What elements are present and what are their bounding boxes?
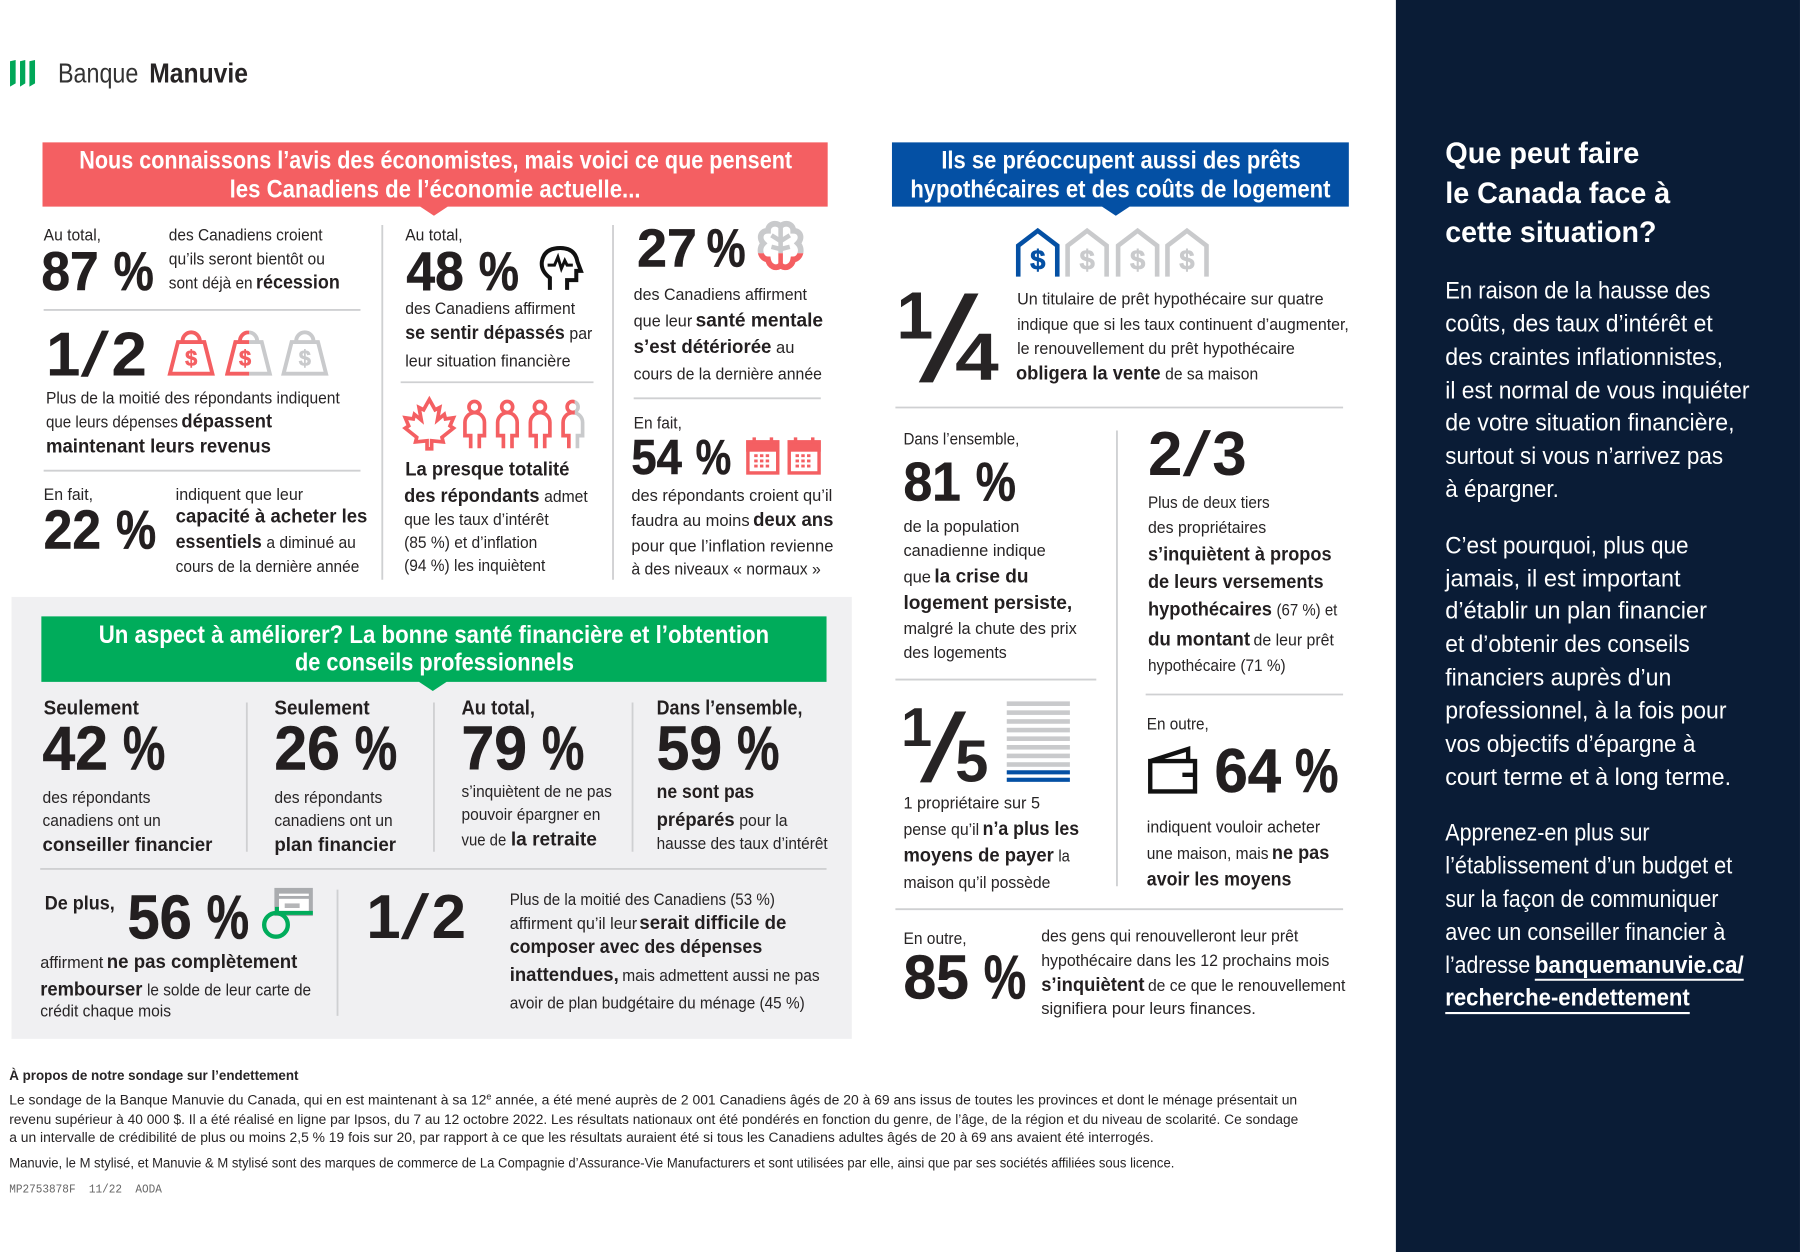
- stat: 81 % housing crisis: Dans l’ensemble,: [903, 430, 1019, 449]
- number: 42 %: [43, 715, 165, 784]
- panel background: [12, 597, 852, 1039]
- number: 85 %: 85: [903, 944, 969, 1013]
- stat: 56 % credit card: De plus,: [45, 894, 115, 915]
- number: 56 %: [127, 883, 249, 952]
- fraction: 1/5: 1: [901, 696, 932, 758]
- stat: 56 % credit card: le solde de leur carte de: [147, 981, 311, 1000]
- heading banner: blue: Ils se préoccupent aussi des prêts: [941, 148, 1301, 175]
- stat: 2/3 mortgage payments: de leurs versements: [1148, 572, 1324, 593]
- sidebar paragraph 1: des craintes inflationnistes,: [1445, 344, 1723, 371]
- stat: 81 % housing crisis: canadienne indique: [903, 541, 1046, 560]
- heading banner: blue: hypothécaires et des coûts de logement: [910, 176, 1330, 203]
- icon: calendars: [748, 437, 819, 473]
- sidebar paragraph 3 with link: avec un conseiller financier à: [1445, 919, 1726, 946]
- sidebar paragraph 1: coûts, des taux d’intérêt et: [1445, 311, 1713, 338]
- icon: credit card statement: [264, 888, 313, 937]
- footer: survey notes: [9, 1067, 1298, 1197]
- stat: 2/3 mortgage payments: de leur prêt: [1254, 631, 1334, 650]
- number: 22 %: %: [116, 499, 156, 561]
- stat: 85 % renewal: signifiera pour leurs finances.: [1041, 999, 1256, 1018]
- number: 27 %: %: [707, 218, 746, 278]
- stat: 48 % overwhelmed: Au total,: [405, 225, 463, 244]
- number: 54 %: [631, 430, 731, 485]
- stat: nearly all respondents: des répondants: [404, 486, 540, 507]
- fraction: 1/4: 4: [955, 321, 999, 395]
- stat: 1/5 cannot afford: n’a plus les: [983, 819, 1079, 840]
- heading banner: green: de conseils professionnels: [295, 649, 574, 676]
- number: 54 %: 54: [631, 430, 682, 485]
- stat: 42 % advisor: conseiller financier: [43, 835, 213, 856]
- number: 26 %: [274, 715, 397, 784]
- number: 59 %: %: [737, 715, 779, 784]
- stat: 1/5 cannot afford: 1 propriétaire sur 5: [903, 794, 1040, 813]
- stat: 27 % mental health: au: [776, 338, 794, 357]
- stat: 48 % overwhelmed: [405, 225, 593, 371]
- stat: nearly all respondents: [404, 399, 588, 575]
- number: 79 %: [461, 715, 584, 784]
- stat: 2/3 mortgage payments: s’inquiètent à propos: [1148, 545, 1332, 566]
- heading banner: red: les Canadiens de l’économie actuelle...: [230, 176, 641, 203]
- icon: houses: $: [1030, 245, 1045, 276]
- fraction: 2/3: 3: [1212, 420, 1247, 489]
- fraction: 1/4: 1: [897, 280, 933, 354]
- sidebar paragraph 2: financiers auprès d’un: [1445, 664, 1671, 691]
- stat: 85 % renewal: En outre,: [903, 929, 967, 948]
- number: 56 %: 56: [127, 883, 192, 952]
- icon: ten lines, two highlighted: [1007, 701, 1070, 782]
- stat: 1/2 unexpected expenses: composer avec des dépenses: [510, 937, 762, 958]
- stat: 87 % recession: qu’ils seront bientôt ou: [169, 249, 325, 268]
- stat: 27 % mental health: cours de la dernière année: [634, 364, 822, 383]
- stat: 1/2 spending: dépassent: [181, 411, 273, 432]
- number: 79 %: %: [542, 715, 584, 784]
- stat: 54 % two years: faudra au moins: [631, 511, 750, 530]
- number: 85 %: %: [984, 944, 1026, 1013]
- stat: 79 % retirement: s’inquiètent de ne pas: [461, 782, 612, 801]
- stat: 59 % unprepared: ne sont pas: [657, 782, 754, 803]
- stat: 85 % renewal: de ce que le renouvellement: [1148, 976, 1346, 995]
- stat: 85 % renewal: s’inquiètent: [1041, 975, 1145, 996]
- number: 79 %: 79: [461, 715, 527, 784]
- sidebar paragraph 1: il est normal de vous inquiéter: [1445, 377, 1749, 404]
- number: 48 %: 48: [406, 240, 464, 302]
- stat: 64 % buy a home: une maison, mais: [1147, 844, 1268, 863]
- stat: 79 % retirement: la retraite: [511, 829, 597, 850]
- stat: 1/5 cannot afford: pense qu’il: [903, 820, 979, 839]
- sidebar paragraph 2: jamais, il est important: [1444, 566, 1681, 593]
- stat: 26 % plan: Seulement: [274, 697, 370, 720]
- sidebar paragraph 3 with link: [1445, 819, 1744, 1013]
- stat: 85 % renewal: des gens qui renouvelleront leur prêt: [1041, 927, 1299, 946]
- stat: 87 % recession: Au total,: [44, 225, 101, 244]
- number: 85 %: [903, 944, 1026, 1013]
- fraction: 2/3: /: [1179, 420, 1214, 489]
- number: 26 %: %: [355, 715, 397, 784]
- stat: 56 % credit card: affirment: [40, 953, 104, 972]
- stat: 1/2 spending: que leurs dépenses: [46, 412, 178, 431]
- number: 48 %: %: [479, 240, 519, 302]
- sidebar heading: [1445, 137, 1671, 249]
- number: 26 %: 26: [274, 715, 340, 784]
- stat: 1/5 cannot afford: maison qu’il possède: [903, 873, 1050, 892]
- stat: nearly all respondents: que les taux d’intérêt: [404, 510, 549, 529]
- stat: 54 % two years: pour que l’inflation revienne: [631, 536, 833, 555]
- fraction: 1/5: [901, 695, 988, 801]
- stat: 85 % renewal: hypothécaire dans les 12 prochains mois: [1041, 951, 1329, 970]
- stat: 87 % recession: sont déjà en: [169, 274, 253, 293]
- sidebar paragraph 2: professionnel, à la fois pour: [1445, 698, 1727, 725]
- fraction: 1/5: /: [913, 695, 972, 801]
- stat: 64 % buy a home: ne pas: [1272, 843, 1329, 864]
- stat: 59 % unprepared: préparés: [657, 810, 735, 831]
- sidebar paragraph 1: [1445, 277, 1749, 503]
- stat: 22 % essentials: capacité à acheter les: [176, 507, 367, 528]
- stat: 79 % retirement: vue de: [461, 830, 506, 849]
- number: 48 %: [406, 240, 519, 302]
- footer: survey notes: année, a été mené auprès de 2 001 Canadiens âgés de 20 à 69 ans issus de toutes les provinces et dont le ménage présentait un: [491, 1091, 1297, 1107]
- stat: 1/5 cannot afford: la: [1058, 846, 1070, 865]
- stat: 22 % essentials: essentiels: [176, 532, 262, 553]
- number: 87 %: 87: [41, 240, 99, 302]
- stat: 54 % two years: des répondants croient qu’il: [631, 486, 832, 505]
- stat: 81 % housing crisis: des logements: [903, 643, 1007, 662]
- fraction: 1/2: [46, 320, 147, 389]
- stat: 42 % advisor: [43, 697, 213, 856]
- icon: head with pulse: [542, 248, 581, 290]
- stat: 22 % essentials: a diminué au: [266, 533, 356, 552]
- fraction: 1/2: [366, 883, 466, 952]
- footer: survey notes: Manuvie, le M stylisé, et Manuvie & M stylisé sont des marques de commerce de La Compagnie d’Assurance-Vie Manufacturers et sont utilisées par elle, ainsi que par ses sociétés affiliées sous licence.: [9, 1154, 1174, 1170]
- stat: 81 % housing crisis: [903, 430, 1077, 662]
- icon: Manulife stripes: [10, 60, 35, 87]
- stat: nearly all respondents: (85 %) et d’inflation: [404, 533, 537, 552]
- stat: 42 % advisor: Seulement: [44, 697, 139, 720]
- icon: houses: $: [1130, 245, 1145, 276]
- number: 54 %: %: [696, 430, 731, 485]
- number: 22 %: [44, 499, 156, 561]
- sidebar paragraph 2: C’est pourquoi, plus que: [1445, 532, 1689, 559]
- stat: 1/2 unexpected expenses: avoir de plan budgétaire du ménage (45 %): [510, 993, 805, 1012]
- footer: survey notes: revenu supérieur à 40 000 $. Il a été réalisé en ligne par Ipsos, du 7 au 12 octobre 2022. Les résultats nationaux ont été pondérés en fonction du genre, de l’âge, de la région et du niveau de scolarité. Ce sondage: [9, 1111, 1298, 1127]
- stat: 81 % housing crisis: malgré la chute des prix: [903, 619, 1077, 638]
- sidebar paragraph 3 with link: l’adresse: [1445, 952, 1530, 979]
- sidebar paragraph 3 with link: recherche-endettement: [1445, 985, 1690, 1012]
- footer: survey notes: e: [486, 1092, 491, 1102]
- stat: 1/4 forced sale: obligera la vente: [1016, 363, 1161, 384]
- stat: 26 % plan: canadiens ont un: [274, 811, 393, 830]
- heading banner: green: Un aspect à améliorer? La bonne santé financière et l’obtention: [99, 622, 769, 649]
- stat: 27 % mental health: santé mentale: [696, 310, 823, 331]
- stat: 26 % plan: plan financier: [274, 835, 397, 856]
- stat: 81 % housing crisis: logement persiste,: [903, 593, 1072, 614]
- fraction: 1/4: /: [910, 272, 987, 405]
- stat: 85 % renewal: [903, 927, 1346, 1018]
- number: 27 %: 27: [637, 218, 697, 278]
- panel: sidebar call to action: [1396, 0, 1800, 1252]
- stat: 2/3 mortgage payments: du montant: [1148, 630, 1251, 651]
- number: 42 %: %: [123, 715, 165, 784]
- stat: 1/2 unexpected expenses: [366, 883, 820, 1012]
- number: 87 %: [41, 240, 154, 302]
- sidebar heading: Que peut faire: [1445, 137, 1639, 170]
- stat: 59 % unprepared: pour la: [739, 811, 788, 830]
- number: 59 %: [657, 715, 779, 784]
- fraction: 1/2: 2: [432, 883, 466, 952]
- icon: shopping bags: $: [239, 346, 251, 371]
- icon: wallet: [1150, 749, 1195, 791]
- fraction: 1/5: 5: [955, 728, 988, 795]
- footer: survey notes: Le sondage de la Banque Manuvie du Canada, qui en est maintenant à sa 12: [9, 1091, 493, 1107]
- icon: maple leaf: [405, 399, 453, 449]
- stat: 1/4 forced sale: le renouvellement du prêt hypothécaire: [1017, 339, 1295, 358]
- number: 27 %: [637, 218, 746, 278]
- number: 64 %: 64: [1215, 737, 1282, 806]
- sidebar paragraph 1: de votre situation financière,: [1445, 409, 1735, 436]
- number: 59 %: 59: [657, 715, 722, 784]
- logo wordmark: [58, 58, 248, 89]
- stat: 48 % overwhelmed: des Canadiens affirment: [405, 299, 575, 318]
- sidebar heading: cette situation?: [1445, 216, 1656, 249]
- stat: 81 % housing crisis: la crise du: [934, 566, 1029, 587]
- number: 42 %: 42: [43, 715, 108, 784]
- sidebar paragraph 3 with link: l’établissement d’un budget et: [1445, 853, 1733, 880]
- stat: 1/2 unexpected expenses: Plus de la moitié des Canadiens (53 %): [510, 890, 775, 909]
- stat: 48 % overwhelmed: par: [569, 324, 593, 343]
- stat: nearly all respondents: (94 %) les inquiètent: [404, 556, 546, 575]
- stat: 1/4 forced sale: [897, 231, 1349, 405]
- stat: 81 % housing crisis: que: [903, 567, 931, 586]
- stat: 1/2 spending: Plus de la moitié des répondants indiquent: [46, 388, 340, 407]
- stat: 22 % essentials: cours de la dernière année: [176, 557, 359, 576]
- number: 81 %: 81: [903, 450, 961, 512]
- stat: 64 % buy a home: indiquent vouloir acheter: [1147, 818, 1321, 837]
- stat: 48 % overwhelmed: leur situation financière: [405, 352, 571, 371]
- sidebar heading: le Canada face à: [1445, 177, 1671, 210]
- icon: people row: [465, 401, 583, 448]
- sidebar paragraph 2: court terme et à long terme.: [1445, 764, 1731, 791]
- fraction: 1/2: 1: [366, 883, 401, 952]
- sidebar paragraph 3 with link: banquemanuvie.ca/: [1535, 952, 1744, 979]
- number: 22 %: 22: [44, 499, 101, 561]
- logo wordmark: Manuvie: [149, 58, 248, 89]
- stat: 56 % credit card: ne pas complètement: [107, 952, 298, 973]
- icon: houses: [1018, 231, 1206, 277]
- stat: 2/3 mortgage payments: [1148, 420, 1338, 675]
- sidebar paragraph 3 with link: sur la façon de communiquer: [1445, 886, 1718, 913]
- stat: 27 % mental health: des Canadiens affirment: [634, 285, 807, 304]
- icon: houses: $: [1079, 245, 1095, 276]
- stat: 64 % buy a home: [1147, 714, 1339, 891]
- stat: 59 % unprepared: Dans l’ensemble,: [657, 697, 802, 720]
- stat: 54 % two years: En fait,: [634, 414, 682, 433]
- stat: 42 % advisor: des répondants: [43, 788, 150, 807]
- stat: 64 % buy a home: avoir les moyens: [1147, 870, 1291, 891]
- fraction: 1/2: /: [77, 320, 112, 389]
- panel: financial health and advice: [12, 597, 852, 1039]
- stat: 1/4 forced sale: indique que si les taux continuent d’augmenter,: [1017, 315, 1349, 334]
- heading banner: blue: [892, 142, 1349, 216]
- stat: 42 % advisor: canadiens ont un: [43, 811, 161, 830]
- stat: 54 % two years: [631, 414, 833, 578]
- footer: survey notes: a un intervalle de crédibilité de plus ou moins 2,5 % 19 fois sur 20, par rapport à ce que les résultats auraient été si tous les Canadiens adultes âgés de 20 à 69 ans avaient été interrogés.: [9, 1129, 1154, 1145]
- number: 81 %: %: [976, 450, 1016, 512]
- stat: 87 % recession: des Canadiens croient: [169, 225, 323, 244]
- sidebar paragraph 2: vos objectifs d’épargne à: [1445, 731, 1696, 758]
- stat: 59 % unprepared: hausse des taux d’intérêt: [657, 834, 828, 853]
- fraction: 2/3: 2: [1148, 420, 1182, 489]
- footer: survey notes: À propos de notre sondage sur l’endettement: [9, 1067, 299, 1083]
- stat: 1/2 spending: [46, 330, 340, 452]
- stat: 79 % retirement: [461, 697, 612, 850]
- logo wordmark: Banque: [58, 58, 138, 89]
- stat: 87 % recession: [41, 225, 340, 302]
- stat: 87 % recession: récession: [256, 273, 340, 294]
- sidebar paragraph 3 with link: Apprenez-en plus sur: [1445, 819, 1650, 846]
- stat: 1/5 cannot afford: moyens de payer: [903, 845, 1054, 866]
- stat: 1/2 spending: maintenant leurs revenus: [46, 437, 271, 458]
- fraction: 1/2: 1: [46, 320, 80, 389]
- stat: 64 % buy a home: En outre,: [1147, 714, 1209, 733]
- stat: 27 % mental health: que leur: [634, 311, 693, 330]
- stat: 2/3 mortgage payments: Plus de deux tiers: [1148, 493, 1270, 512]
- stat: 81 % housing crisis: de la population: [903, 517, 1019, 536]
- stat: 22 % essentials: En fait,: [44, 485, 93, 504]
- stat: 22 % essentials: indiquent que leur: [176, 485, 303, 504]
- stat: 2/3 mortgage payments: des propriétaires: [1148, 518, 1266, 537]
- stat: 79 % retirement: pouvoir épargner en: [461, 805, 600, 824]
- stat: 56 % credit card: rembourser: [40, 980, 143, 1001]
- stat: 79 % retirement: Au total,: [461, 697, 535, 720]
- panel: economy opinions: [41, 142, 833, 580]
- icon: shopping bags: [170, 332, 326, 374]
- icon: brain: [760, 224, 801, 267]
- stat: 26 % plan: [274, 697, 397, 856]
- stat: 1/2 unexpected expenses: serait difficile de: [639, 913, 786, 934]
- sidebar paragraph 1: à épargner.: [1445, 476, 1559, 503]
- number: 64 %: [1215, 737, 1339, 806]
- fraction: 1/2: /: [397, 883, 433, 952]
- stat: 22 % essentials: [44, 485, 367, 576]
- heading banner: red: Nous connaissons l’avis des économistes, mais voici ce que pensent: [79, 148, 792, 175]
- stat: 56 % credit card: [40, 883, 313, 1020]
- stat: 27 % mental health: [634, 218, 823, 383]
- stat: 56 % credit card: crédit chaque mois: [40, 1001, 171, 1020]
- sidebar paragraph 2: [1444, 532, 1731, 791]
- stat: 1/2 unexpected expenses: mais admettent aussi ne pas: [622, 966, 820, 985]
- stat: 1/2 unexpected expenses: affirment qu’il leur: [510, 914, 638, 933]
- stat: 54 % two years: deux ans: [753, 510, 833, 531]
- icon: shopping bags: $: [185, 346, 197, 371]
- heading banner: red: [43, 142, 828, 216]
- stat: 1/4 forced sale: Un titulaire de prêt hypothécaire sur quatre: [1017, 290, 1324, 309]
- sidebar background: [1396, 0, 1800, 1252]
- footer: survey notes: MP2753878F 11/22 AODA: [9, 1183, 163, 1197]
- sidebar paragraph 1: En raison de la hausse des: [1445, 277, 1710, 304]
- number: 81 %: [903, 450, 1016, 512]
- logo: Banque Manuvie: [10, 58, 248, 89]
- stat: 1/2 unexpected expenses: inattendues,: [510, 965, 619, 986]
- number: 64 %: %: [1295, 737, 1339, 806]
- sidebar paragraph 2: d’établir un plan financier: [1445, 598, 1707, 625]
- stat: 1/4 forced sale: de sa maison: [1165, 364, 1258, 383]
- stat: 48 % overwhelmed: se sentir dépassés: [405, 323, 565, 344]
- stat: 2/3 mortgage payments: hypothécaires: [1148, 600, 1272, 621]
- sidebar paragraph 1: surtout si vous n’arrivez pas: [1445, 443, 1723, 470]
- stat: nearly all respondents: La presque totalité: [405, 460, 569, 481]
- stat: 2/3 mortgage payments: (67 %) et: [1277, 601, 1338, 620]
- stat: 54 % two years: à des niveaux « normaux »: [631, 559, 821, 578]
- stat: 1/5 cannot afford: [901, 695, 1079, 892]
- stat: nearly all respondents: admet: [544, 487, 588, 506]
- stat: 2/3 mortgage payments: hypothécaire (71 %): [1148, 656, 1286, 675]
- sidebar paragraph 2: et d’obtenir des conseils: [1445, 631, 1690, 658]
- fraction: 2/3: [1148, 420, 1247, 489]
- stat: 59 % unprepared: [657, 697, 828, 853]
- icon: houses: $: [1179, 245, 1195, 276]
- heading banner: green: [41, 616, 827, 691]
- fraction: 1/2: 2: [111, 320, 147, 389]
- stat: 26 % plan: des répondants: [274, 788, 382, 807]
- panel: mortgages and housing costs: [892, 142, 1349, 1018]
- stat: 27 % mental health: s’est détériorée: [634, 337, 771, 358]
- number: 87 %: %: [114, 240, 154, 302]
- number: 56 %: %: [207, 883, 249, 952]
- icon: shopping bags: $: [299, 346, 311, 371]
